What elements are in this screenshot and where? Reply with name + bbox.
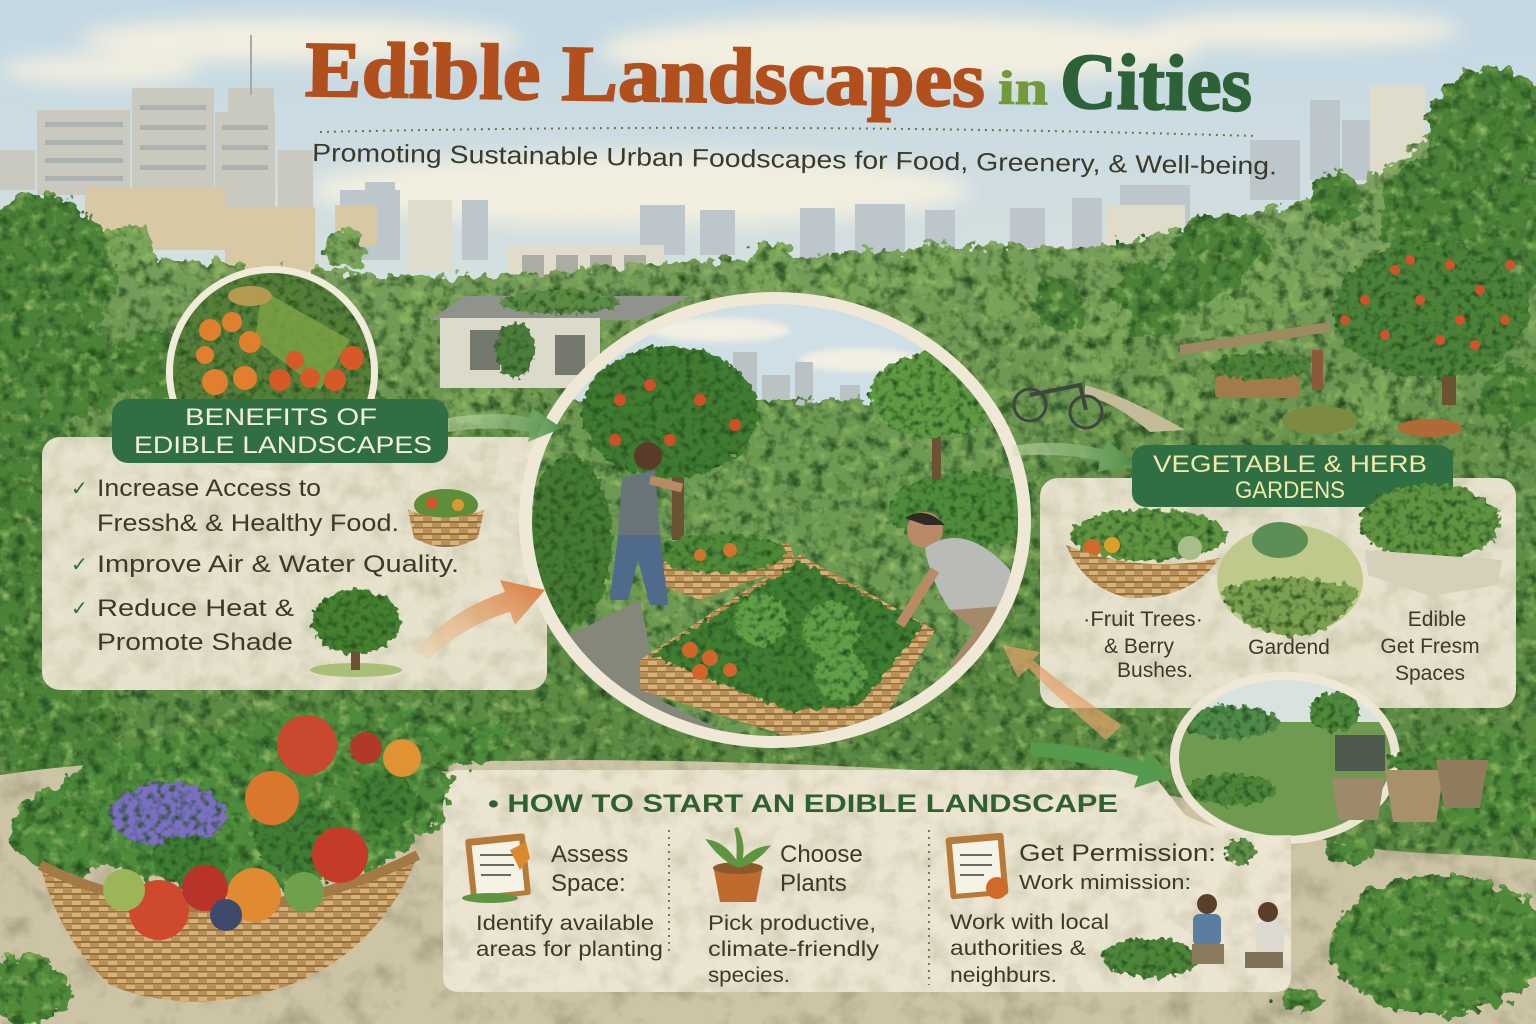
- small garden circle: [1170, 672, 1400, 844]
- icon: tree: [310, 590, 402, 677]
- step: choose plants: climate-friendly: [708, 938, 880, 961]
- ground lower: [0, 758, 1536, 1024]
- benefit list: Fressh& & Healthy Food.: [97, 510, 399, 537]
- tree with fruit: [582, 346, 758, 540]
- title: [305, 27, 1253, 129]
- title: in: [998, 62, 1048, 115]
- heading: gardens: VEGETABLE & HERB: [1153, 451, 1427, 478]
- step: assess space: areas for planting: [476, 938, 663, 961]
- benefit list: Improve Air & Water Quality.: [97, 551, 459, 578]
- icon: raised planter: [1360, 484, 1502, 596]
- step: get permission: [945, 833, 1284, 987]
- step: get permission: Work with local: [950, 911, 1109, 934]
- heading: gardens: GARDENS: [1235, 477, 1345, 504]
- heading: benefits: EDIBLE LANDSCAPES: [134, 432, 432, 459]
- subtitle: [312, 128, 1277, 180]
- step: choose plants: Pick productive,: [708, 912, 876, 935]
- arrow: bottom panel to small circle: [1030, 742, 1172, 788]
- icon: basket: [408, 489, 484, 547]
- tree right: [870, 353, 1000, 480]
- arrow: centre to gardens: [1012, 440, 1132, 472]
- woman gardener: [610, 442, 682, 605]
- icon: clipboard: [462, 833, 531, 903]
- icon: produce circle: [166, 266, 378, 478]
- captions: ·Fruit Trees·: [1083, 608, 1203, 631]
- icon: garden oval: [1217, 522, 1363, 636]
- captions: Bushes.: [1117, 659, 1193, 682]
- captions: [1083, 608, 1480, 685]
- arrows: [416, 408, 1172, 788]
- captions: Spaces: [1395, 662, 1465, 685]
- captions: & Berry: [1104, 635, 1175, 658]
- step: get permission: authorities &: [950, 937, 1086, 960]
- step: assess space: Space:: [551, 870, 626, 897]
- icon: people planting: [1102, 839, 1284, 978]
- heading: how to start: • HOW TO START AN EDIBLE LANDSCAPE: [488, 790, 1118, 818]
- panel: vegetable and herb gardens: [1040, 445, 1516, 708]
- big basket: [10, 707, 515, 1002]
- house: [430, 290, 690, 388]
- city skyline: [0, 35, 1435, 300]
- back bed: [655, 533, 795, 600]
- benefit list: Promote Shade: [97, 629, 293, 656]
- benefit list: [71, 475, 459, 656]
- icon: potted plant: [710, 828, 766, 902]
- benefit list: Increase Access to: [97, 475, 321, 502]
- arrow: bottom circle to centre: [1002, 645, 1122, 740]
- path and beds right: [1014, 322, 1462, 437]
- step: get permission: Work mimission:: [1019, 872, 1191, 894]
- step: choose plants: [708, 828, 880, 987]
- arrow: benefits to centre: [448, 408, 562, 442]
- benefit list: Reduce Heat &: [97, 595, 294, 622]
- step: assess space: Assess: [551, 841, 628, 868]
- benefit list: ✓: [71, 554, 88, 576]
- benefit list: ✓: [71, 478, 88, 500]
- step: assess space: [462, 833, 663, 961]
- fruit tree right: [1334, 242, 1530, 405]
- title: Cities: [1059, 39, 1253, 129]
- man gardener: [900, 512, 1018, 670]
- benefit list: ✓: [71, 598, 88, 620]
- step: choose plants: Choose: [780, 841, 863, 868]
- panel: benefits: [42, 399, 547, 690]
- icon: permit document: [945, 833, 1009, 899]
- heading: gardens: [1132, 445, 1453, 507]
- icon: vegetable basket: [1066, 509, 1226, 598]
- captions: Edible: [1408, 608, 1466, 631]
- main garden circle: [500, 290, 1050, 760]
- captions: Gardend: [1248, 636, 1330, 659]
- step: get permission: neighburs.: [950, 964, 1057, 987]
- arrow: shade to centre: [416, 580, 545, 660]
- step: choose plants: species.: [708, 964, 790, 987]
- title: Edible Landscapes: [305, 27, 986, 124]
- step: assess space: Identify available: [476, 912, 654, 935]
- step: choose plants: Plants: [780, 870, 847, 897]
- subtitle: Promoting Sustainable Urban Foodscapes for Food, Greenery, & Well-being.: [312, 139, 1277, 180]
- step: get permission: Get Permission:: [1019, 840, 1216, 867]
- front bed: [640, 555, 935, 740]
- icon: pots: [1332, 750, 1488, 822]
- panel: how to start: [443, 770, 1291, 992]
- heading: benefits: BENEFITS OF: [185, 404, 377, 431]
- captions: Get Fresm: [1380, 635, 1480, 658]
- heading: benefits: [112, 399, 448, 463]
